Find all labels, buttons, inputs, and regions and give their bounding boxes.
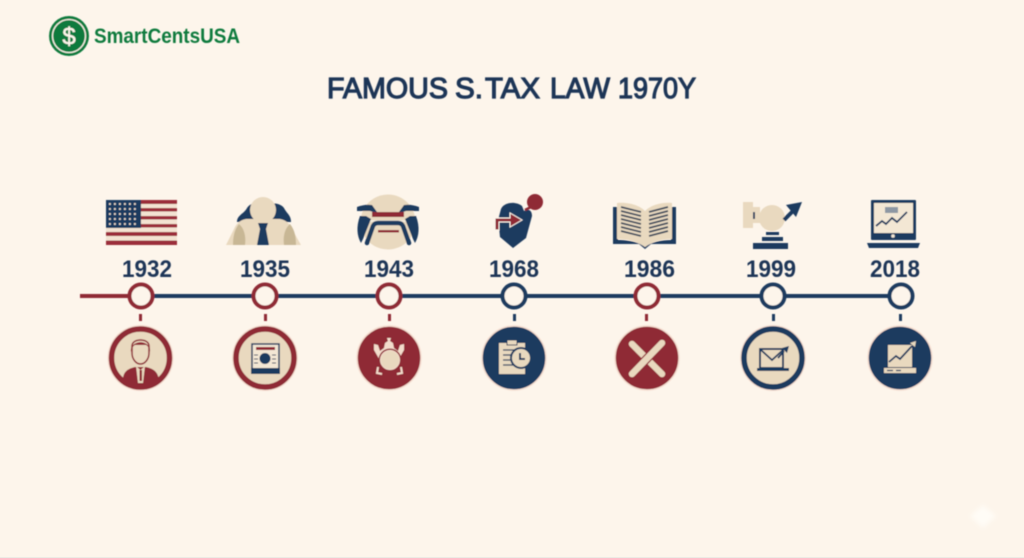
badge: crossed pencils: [615, 326, 679, 390]
node 1968: [502, 284, 526, 308]
node 1986: [636, 284, 658, 308]
event 1932: [106, 200, 177, 391]
logo: SmartCentsUSA: [49, 16, 240, 56]
node 1943: [378, 284, 400, 308]
badge: document tablet: [232, 325, 298, 391]
node 1932: [130, 284, 152, 308]
year 1968: 1968: [489, 256, 539, 283]
logo: SmartCentsUSA: SmartCentsUSA: [94, 25, 240, 48]
year 1935: 1935: [240, 256, 290, 283]
event 1968: [482, 194, 546, 390]
event 1999: [740, 202, 806, 391]
badge: person in suit: [108, 325, 174, 391]
title: [327, 73, 696, 105]
year 1932: 1932: [122, 256, 172, 283]
node 1935: [254, 284, 276, 308]
icon: shield with arrow: [495, 194, 543, 248]
title: S.: [455, 73, 483, 105]
event 1943: [357, 194, 421, 390]
title: 1970Y: [618, 73, 696, 105]
icon: globe on pedestal with arrow: [743, 202, 802, 249]
badge: chart on laptop: [868, 326, 932, 390]
badge: clipboard and clock: [482, 326, 546, 390]
event 2018: [867, 200, 932, 390]
connector 1943: [388, 314, 391, 321]
year 1943: 1943: [364, 256, 414, 283]
connector 1986: [645, 314, 648, 321]
node 1999: [762, 284, 784, 308]
icon: official in suit: [226, 197, 301, 245]
timeline axis: [80, 294, 900, 298]
connector 1968: [513, 314, 516, 321]
title: FAMOUS: [327, 73, 448, 105]
badge: envelope on laptop: [740, 325, 806, 391]
connector 1932: [139, 314, 142, 321]
year 1999: 1999: [746, 256, 796, 283]
icon: laptop with rising chart: [867, 200, 920, 248]
connector 1935: [264, 314, 267, 321]
badge: crown: [357, 326, 421, 390]
connector 1999: [772, 314, 775, 321]
watermark diamond: [970, 505, 996, 528]
connector 2018: [899, 314, 902, 321]
year 1986: 1986: [624, 256, 675, 283]
event 1935: [226, 197, 301, 391]
node 2018: [890, 284, 912, 308]
icon: capitol seal: [357, 194, 419, 250]
event 1986: [613, 203, 679, 390]
title: TAX: [485, 73, 540, 105]
year 2018: 2018: [870, 256, 920, 283]
icon: American flag: [106, 200, 177, 245]
title: LAW: [550, 73, 611, 105]
logo: SmartCentsUSA: $: [62, 24, 76, 50]
icon: open book: [613, 203, 676, 249]
